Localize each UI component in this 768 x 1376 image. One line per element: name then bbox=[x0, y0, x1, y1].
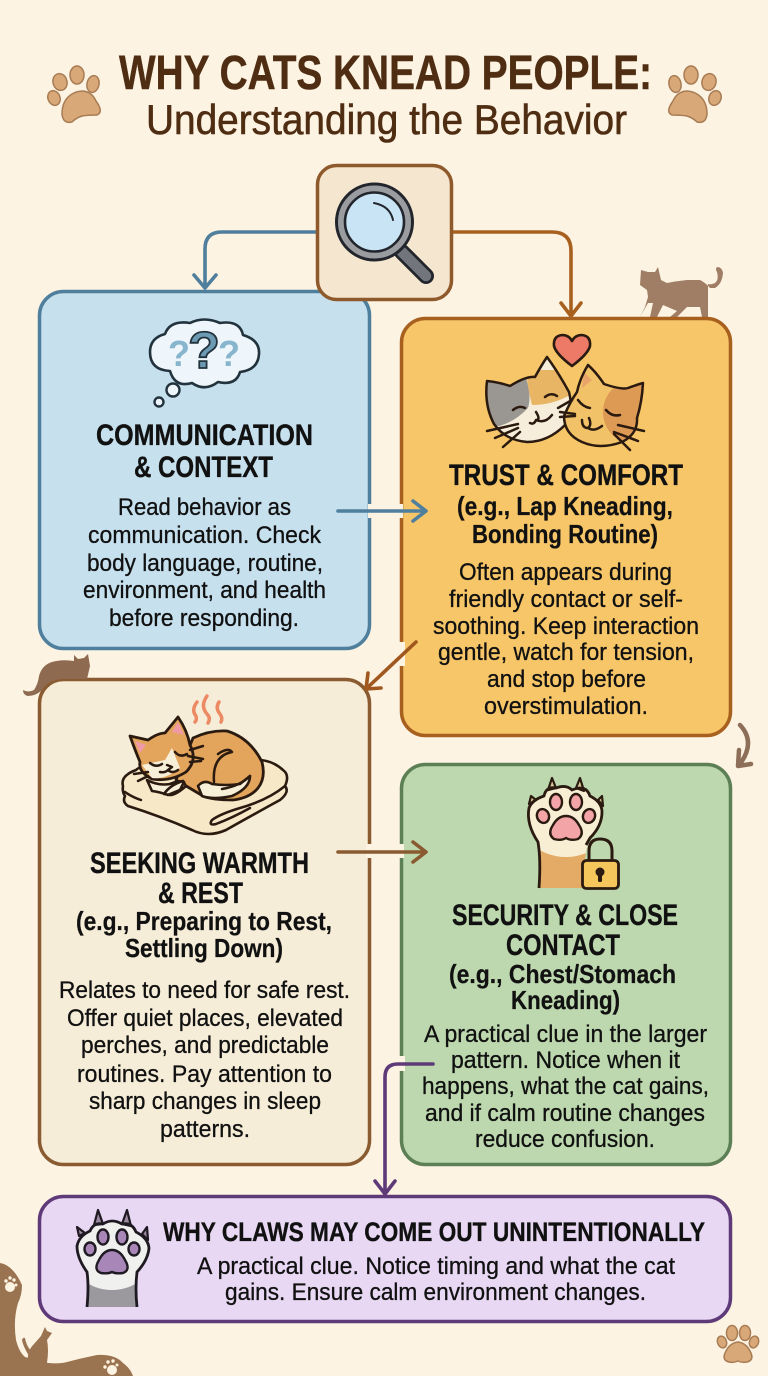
text: claws body bbox=[197, 1253, 675, 1306]
heading: seeking warmth: & REST bbox=[158, 877, 243, 910]
heading: communication: & CONTEXT bbox=[134, 451, 273, 484]
heading: communication bbox=[96, 419, 313, 484]
arrow: magnifier to trust bbox=[452, 232, 581, 316]
icon: thought bubble with question marks: ? bbox=[168, 333, 190, 374]
arrow: communication to trust bbox=[338, 501, 426, 521]
icon: two cats with heart bbox=[480, 335, 657, 450]
text: seeking body: patterns. bbox=[160, 1116, 250, 1143]
panel: trust and comfort bbox=[402, 318, 730, 736]
text: security body: reduce confusion. bbox=[475, 1126, 655, 1153]
icon: small white paw on hill right bbox=[103, 1359, 118, 1375]
heading: security bbox=[452, 899, 678, 962]
icon: thought bubble with question marks bbox=[150, 320, 259, 406]
panel: communication and context bbox=[40, 292, 370, 648]
arrow: seeking warmth to security bbox=[338, 842, 426, 862]
text: seeking body: routines. Pay attention to bbox=[77, 1061, 332, 1088]
subheading: security examples: (e.g., Chest/Stomach bbox=[449, 959, 676, 989]
text: security body: and if calm routine changes bbox=[425, 1100, 705, 1127]
subheading: trust examples: (e.g., Lap Kneading, bbox=[457, 491, 673, 521]
text: communication body: environment, and health bbox=[83, 577, 326, 604]
text: seeking body: Relates to need for safe rest. bbox=[59, 977, 350, 1004]
heading: security: SECURITY & CLOSE bbox=[452, 899, 678, 932]
subheading: trust examples: Bonding Routine) bbox=[472, 519, 658, 549]
arrow: curved between trust and security bbox=[738, 725, 751, 766]
text: trust body: and stop before bbox=[487, 666, 646, 693]
text: trust body: Often appears during bbox=[459, 559, 672, 586]
text: communication body: body language, routine, bbox=[87, 550, 323, 577]
icon: small white paw on hill bbox=[4, 1276, 18, 1292]
arrow: security to claws bbox=[375, 1056, 433, 1194]
text: seeking body: Offer quiet places, elevated bbox=[67, 1005, 343, 1032]
text: security body bbox=[422, 1021, 709, 1153]
text: security body: A practical clue in the larger bbox=[424, 1021, 707, 1048]
text: seeking body bbox=[59, 977, 350, 1143]
icon: sleeping cat on blanket bbox=[123, 696, 287, 834]
text: security body: pattern. Notice when it bbox=[451, 1047, 680, 1074]
subheading: security examples: Kneading) bbox=[511, 985, 620, 1015]
text: seeking body: sharp changes in sleep bbox=[89, 1088, 321, 1115]
icon: thought bubble with question marks: ? bbox=[218, 333, 240, 374]
text: communication body: Read behavior as bbox=[118, 494, 291, 521]
decoration: hill with cat silhouette bottom left bbox=[0, 1263, 133, 1376]
title bbox=[119, 47, 652, 143]
text: trust body bbox=[433, 559, 699, 720]
icon: paw with padlock bbox=[518, 773, 618, 888]
text: trust body: soothing. Keep interaction bbox=[433, 613, 699, 640]
text: security body: happens, what the cat gains, bbox=[422, 1073, 709, 1100]
cat silhouette sitting on seeking warmth panel bbox=[23, 654, 90, 696]
title: WHY CATS KNEAD PEOPLE: bbox=[119, 47, 652, 100]
text: claws body: gains. Ensure calm environment changes. bbox=[225, 1279, 646, 1306]
text: trust body: gentle, watch for tension, bbox=[438, 639, 694, 666]
subheading: seeking examples: Settling Down) bbox=[125, 933, 283, 963]
heading: seeking warmth: SEEKING WARMTH bbox=[90, 847, 309, 880]
icon: paw bottom right bbox=[716, 1326, 760, 1362]
icon: paw top right bbox=[667, 66, 723, 122]
title: Understanding the Behavior bbox=[146, 96, 627, 143]
text: trust body: overstimulation. bbox=[484, 693, 648, 720]
heading: trust and comfort: TRUST & COMFORT bbox=[449, 459, 683, 492]
subheading: seeking examples: (e.g., Preparing to Rest, bbox=[76, 906, 332, 936]
text: communication body: communication. Check bbox=[88, 522, 322, 549]
icon: paw top left bbox=[46, 66, 101, 122]
icon: magnifying glass box bbox=[318, 166, 452, 300]
heading: seeking warmth bbox=[90, 847, 309, 910]
panel: security and close contact bbox=[402, 764, 730, 1164]
text: seeking body: perches, and predictable bbox=[81, 1032, 329, 1059]
text: communication body: before responding. bbox=[109, 605, 299, 632]
text: communication body bbox=[83, 494, 326, 632]
icon: thought bubble with question marks: ? bbox=[188, 322, 220, 380]
heading: security: CONTACT bbox=[506, 929, 620, 962]
heading: communication: COMMUNICATION bbox=[96, 419, 313, 452]
subheading: trust examples bbox=[457, 491, 673, 549]
arrow: trust to seeking warmth bbox=[366, 642, 416, 689]
cat silhouette walking on trust panel bbox=[640, 267, 723, 317]
icon: paw with claws bbox=[76, 1208, 150, 1308]
text: claws body: A practical clue. Notice timing and what the cat bbox=[197, 1253, 675, 1280]
text: trust body: friendly contact or self- bbox=[449, 586, 683, 613]
arrow: magnifier to communication bbox=[194, 232, 318, 288]
subheading: seeking examples bbox=[76, 906, 332, 963]
panel: seeking warmth and rest bbox=[40, 680, 370, 1164]
subheading: security examples bbox=[449, 959, 676, 1015]
panel: why claws may come out bbox=[40, 1196, 730, 1322]
